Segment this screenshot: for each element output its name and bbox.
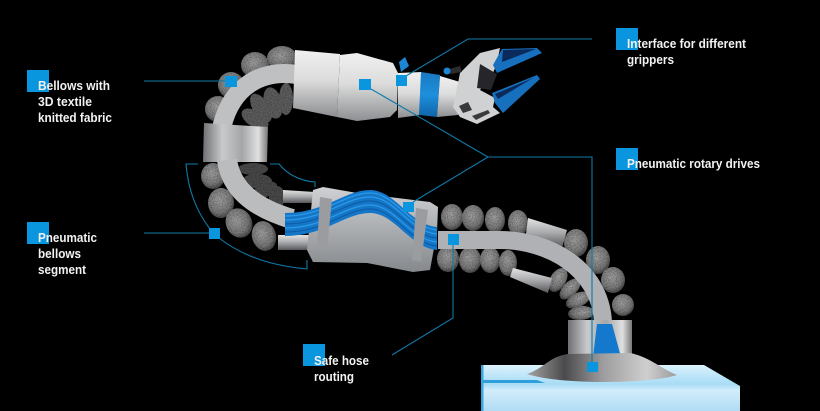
lower arm cylinders	[526, 218, 567, 248]
label: bellows: knitted fabric	[38, 111, 112, 125]
upper bend spine	[222, 74, 300, 126]
upper finger	[493, 48, 542, 73]
gripper body shadow	[477, 64, 497, 90]
label: safe hose routing: Safe hose	[314, 354, 369, 368]
base cylinders	[568, 320, 632, 354]
label: pneumatic bellows segment	[27, 222, 97, 277]
line: rotary drives	[371, 89, 592, 363]
gripper body	[453, 48, 500, 124]
suction disc	[527, 353, 677, 382]
wrist collar	[398, 72, 422, 118]
lower bend spine	[227, 160, 292, 219]
label: bellows	[27, 70, 112, 125]
lower arm spine	[438, 240, 603, 322]
label: rotary drives: Pneumatic rotary drives	[627, 157, 760, 171]
callout markers	[209, 75, 598, 372]
lower arm inner bellows	[437, 246, 595, 321]
label: interface: grippers	[627, 53, 674, 67]
gripper base details	[459, 102, 490, 120]
line: safe hose	[392, 244, 453, 355]
lower finger	[492, 75, 540, 113]
label: pneumatic bellows segment: segment	[38, 263, 87, 277]
upper inner bellows	[238, 83, 293, 134]
gripper fitting	[444, 66, 462, 74]
robot arm	[201, 46, 677, 382]
lower arm outer bellows	[441, 204, 634, 316]
bracket: outer arc	[186, 164, 307, 269]
lower bend inner bellows	[238, 163, 285, 208]
wrist neck	[437, 76, 460, 117]
label: rotary drives	[616, 148, 760, 171]
middle housing	[307, 187, 438, 272]
blue wrist ring	[419, 72, 440, 117]
base blue hoses	[593, 324, 621, 357]
line: bellows segment	[144, 232, 210, 234]
callout lines	[144, 39, 592, 363]
label: interface: Interface for different	[627, 37, 747, 51]
label: bellows: 3D textile	[38, 95, 92, 109]
upper arm section	[293, 50, 340, 117]
label: safe hose routing	[303, 344, 369, 384]
line: bellows	[144, 80, 226, 82]
middle connector cylinders	[283, 190, 315, 203]
pedestal block	[481, 365, 740, 411]
lower bend outer bellows	[201, 163, 279, 254]
vertical elbow cylinders	[203, 123, 268, 162]
bracket: inner arc	[270, 164, 315, 187]
elbow barrel	[337, 53, 398, 121]
upper outer bellows	[205, 46, 297, 122]
label: safe hose routing: routing	[314, 370, 354, 384]
blue hose bundle	[285, 190, 437, 250]
line: interface	[406, 39, 592, 76]
label: bellows: Bellows with	[38, 79, 110, 93]
finger ribs	[495, 49, 536, 99]
label: interface	[616, 28, 747, 67]
pneumatic fitting	[399, 57, 409, 72]
label: pneumatic bellows segment: bellows	[38, 247, 81, 261]
hose straps	[317, 197, 332, 249]
label: pneumatic bellows segment: Pneumatic	[38, 231, 97, 245]
